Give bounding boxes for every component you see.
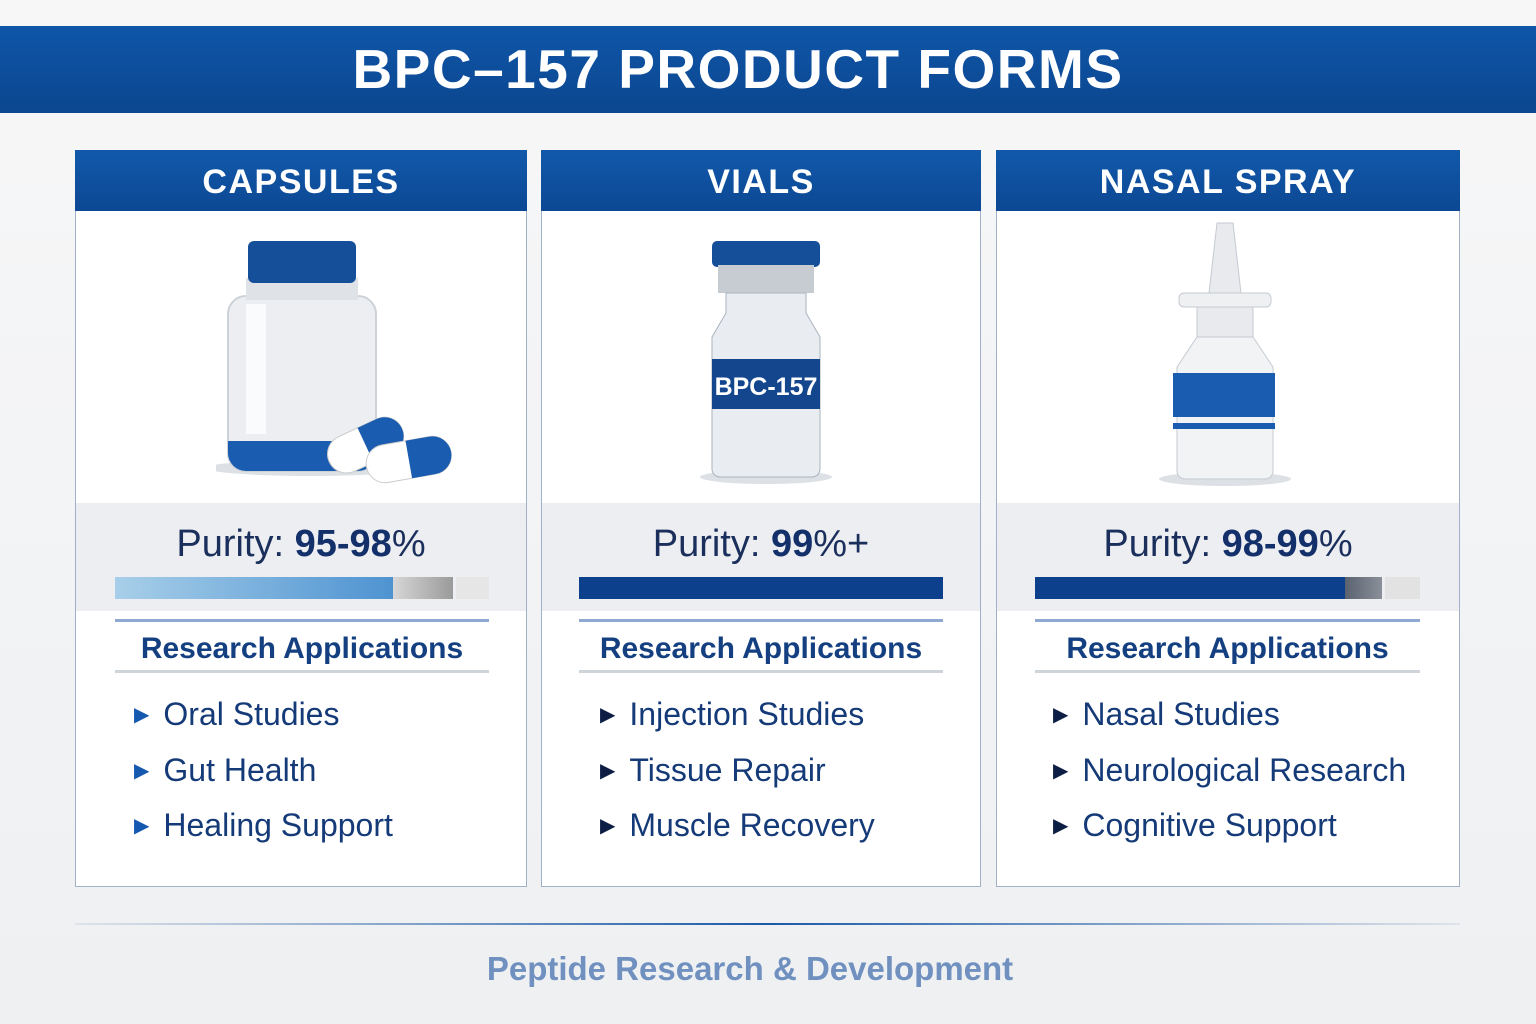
list: vials: Tissue Repair xyxy=(629,752,826,788)
list: nasal spray xyxy=(1053,696,1406,843)
header: vials: VIALS xyxy=(707,163,815,201)
list: nasal spray: Neurological Research xyxy=(1082,752,1406,788)
header: capsules xyxy=(75,150,527,211)
header: vials xyxy=(541,150,981,211)
purity band: vials xyxy=(542,503,980,611)
list: nasal spray: Cognitive Support xyxy=(1082,807,1337,843)
research applications: vials xyxy=(579,619,943,673)
icon: capsule bottle xyxy=(216,241,452,484)
title: BPC–157 PRODUCT FORMS xyxy=(352,38,1124,100)
icon: nasal spray bottle xyxy=(1159,222,1291,486)
title xyxy=(0,26,1536,113)
icon: vial xyxy=(700,241,832,484)
purity band: capsules xyxy=(76,503,526,611)
list: nasal spray: Nasal Studies xyxy=(1082,696,1280,732)
icon: vial: BPC-157 xyxy=(715,373,817,401)
research applications: nasal spray: Research Applications xyxy=(1066,632,1389,665)
panel: nasal spray xyxy=(996,150,1460,887)
purity band: nasal spray: Purity: 98-99% xyxy=(1103,523,1353,565)
list: capsules: Gut Health xyxy=(163,752,316,788)
research applications: capsules xyxy=(115,619,489,673)
header: nasal spray xyxy=(996,150,1460,211)
header: capsules: CAPSULES xyxy=(202,163,400,201)
purity band: vials: Purity: 99%+ xyxy=(653,523,869,565)
list: capsules: Oral Studies xyxy=(163,696,339,732)
research applications: capsules: Research Applications xyxy=(141,632,463,665)
footer text: Peptide Research & Development xyxy=(487,950,1013,987)
list: vials xyxy=(600,696,875,843)
panel: capsules xyxy=(75,150,527,887)
list: capsules xyxy=(134,696,393,843)
list: capsules: Healing Support xyxy=(163,807,393,843)
header: nasal spray: NASAL SPRAY xyxy=(1100,163,1356,201)
research applications: vials: Research Applications xyxy=(600,632,922,665)
list: vials: Injection Studies xyxy=(629,696,864,732)
purity band: capsules: Purity: 95-98% xyxy=(176,523,426,565)
list: vials: Muscle Recovery xyxy=(629,807,875,843)
panel: vials xyxy=(541,150,981,887)
purity band: nasal spray xyxy=(997,503,1459,611)
research applications: nasal spray xyxy=(1035,619,1420,673)
